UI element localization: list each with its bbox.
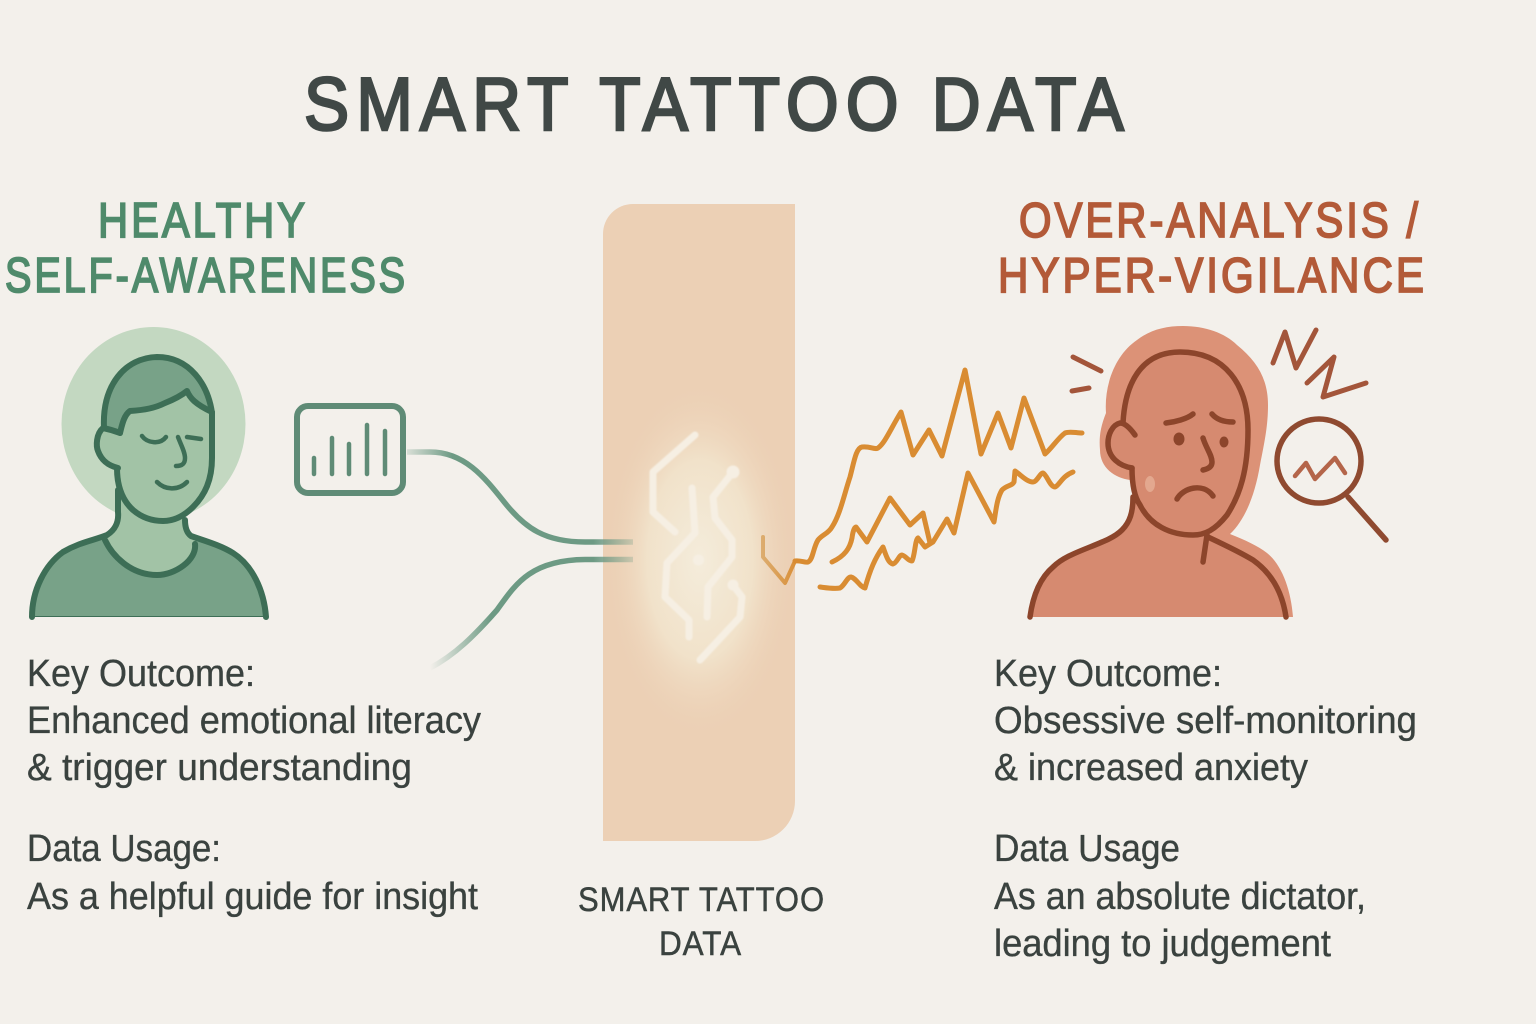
text block: healthy key outcome	[27, 653, 481, 789]
text block: over-analysis key outcome	[994, 653, 1417, 789]
arrow: second connector to tattoo	[430, 560, 633, 668]
outline: right shoulder	[1208, 537, 1286, 617]
text block: healthy key outcome: Enhanced emotional literacy	[27, 700, 481, 742]
closed eyes	[142, 436, 201, 442]
text block: over-analysis data usage	[994, 828, 1366, 965]
outline: hairline	[120, 391, 212, 433]
outline: left shoulder	[1030, 497, 1133, 617]
smile	[157, 482, 187, 488]
face	[1108, 352, 1248, 535]
text block: over-analysis key outcome: & increased anxiety	[994, 747, 1308, 789]
text block: healthy data usage: As a helpful guide for insight	[27, 876, 478, 918]
cheek mark	[1145, 476, 1155, 492]
text block: over-analysis data usage: As an absolute dictator,	[994, 876, 1366, 918]
halo	[62, 327, 246, 521]
heading: over-analysis / hyper-vigilance: HYPER-VIGILANCE	[998, 249, 1427, 303]
arrow: connector from chart to tattoo	[407, 452, 633, 542]
heading: over-analysis / hyper-vigilance: OVER-ANALYSIS /	[1019, 194, 1421, 248]
heading: healthy self-awareness: SELF-AWARENESS	[5, 249, 408, 303]
baseline	[30, 616, 268, 618]
brows	[1166, 414, 1233, 423]
shirt	[32, 535, 266, 617]
text block: over-analysis data usage: Data Usage	[994, 828, 1180, 870]
outline: shoulders	[32, 490, 266, 617]
text block: over-analysis data usage: leading to judgement	[994, 923, 1331, 965]
icon: anxious person	[1030, 326, 1293, 617]
text block: healthy data usage: Data Usage:	[27, 828, 221, 870]
outline: ear	[97, 428, 120, 468]
text block: healthy key outcome: Key Outcome:	[27, 653, 255, 695]
heading: healthy self-awareness: HEALTHY	[98, 194, 308, 248]
label: smart tattoo data	[578, 881, 825, 963]
neck	[105, 480, 195, 575]
outline: neck line	[1203, 535, 1207, 562]
hair	[104, 357, 212, 433]
outer aura	[1100, 326, 1293, 617]
text block: over-analysis key outcome: Key Outcome:	[994, 653, 1222, 695]
outline: ear	[1108, 423, 1135, 468]
text block: healthy data usage	[27, 828, 478, 918]
label: smart tattoo data: SMART TATTOO	[578, 881, 825, 919]
icon: stress marks	[1072, 330, 1366, 397]
icon: calm person with halo	[30, 327, 268, 617]
icon: data chart box	[297, 406, 403, 493]
frown	[1177, 488, 1213, 499]
text block: over-analysis key outcome: Obsessive self-monitoring	[994, 700, 1417, 742]
label: smart tattoo data: DATA	[659, 925, 742, 963]
chart: chaotic orange signal lines	[763, 370, 1082, 588]
text block: healthy key outcome: & trigger understanding	[27, 747, 412, 789]
outline: collar	[105, 540, 195, 575]
body	[1030, 500, 1286, 617]
heading: over-analysis / hyper-vigilance	[998, 194, 1427, 303]
title: SMART TATTOO DATA	[304, 62, 1131, 146]
nose	[1203, 438, 1212, 470]
eyes	[1174, 432, 1228, 448]
icon: magnifying glass	[1277, 419, 1386, 540]
face	[97, 357, 212, 521]
tattoo glow	[605, 382, 795, 738]
outline: head	[1123, 352, 1248, 535]
outline: head	[104, 357, 212, 521]
panel: skin strip	[603, 204, 795, 841]
nose	[176, 437, 185, 466]
heading: healthy self-awareness	[5, 194, 408, 303]
icon: glowing tattoo circuit	[653, 435, 742, 660]
